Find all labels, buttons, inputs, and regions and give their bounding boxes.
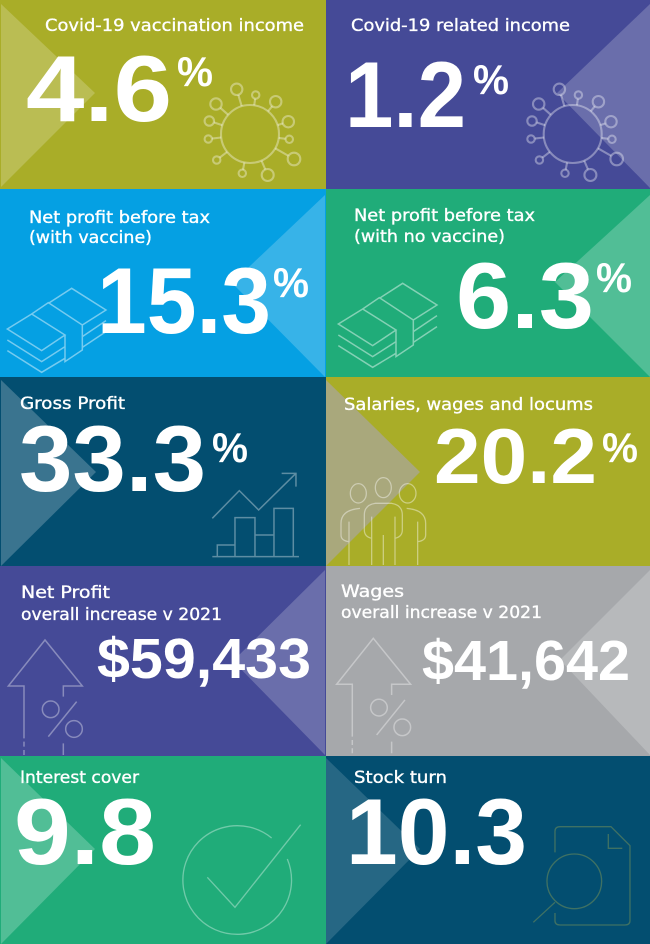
panel: Net profit before tax (with vaccine) [0, 189, 326, 377]
percent sign: % [273, 259, 309, 306]
value: $59,433 [97, 627, 311, 691]
icon: banknotes [7, 288, 106, 372]
heading: Salaries, wages and locums [344, 395, 593, 415]
value: 6.3 [456, 243, 594, 348]
panel: Stock turn [326, 756, 650, 944]
heading: Net Profit [21, 583, 110, 603]
panel: Net profit before tax (with no vaccine) [326, 189, 650, 377]
panel: Gross Profit [0, 377, 326, 566]
subheading: overall increase v 2021 [341, 603, 542, 623]
percent sign: % [596, 254, 632, 301]
value: 9.8 [14, 779, 156, 884]
heading: Covid-19 related income [351, 16, 570, 36]
panel: Net Profit overall increase [0, 566, 326, 756]
icon: document magnifier [533, 827, 630, 925]
value: 33.3 [19, 406, 206, 511]
panel: Interest cover [0, 756, 326, 944]
value: 10.3 [346, 779, 527, 884]
subheading: (with vaccine) [29, 228, 152, 248]
value: 1.2 [345, 42, 466, 147]
heading: Net profit before tax [29, 208, 210, 228]
panel: Covid-19 vaccination income [0, 0, 326, 189]
heading: Gross Profit [20, 394, 125, 414]
value: $41,642 [422, 629, 630, 693]
panel: Salaries, wages and locums [326, 377, 650, 566]
percent sign: % [473, 56, 509, 103]
heading: Stock turn [354, 768, 447, 788]
panel: Covid-19 related income [326, 0, 650, 189]
icon: check mark [183, 825, 301, 934]
panel: Wages overall increase [326, 566, 650, 756]
icon: virus [527, 84, 623, 181]
heading: Net profit before tax [354, 206, 535, 226]
heading: Wages [341, 582, 404, 602]
icon: banknotes [338, 283, 437, 367]
percent sign: % [177, 48, 213, 95]
percent sign: % [602, 424, 638, 471]
icon: percent up arrow [8, 640, 82, 755]
value: 20.2 [434, 412, 597, 500]
icon: people [341, 478, 426, 565]
value: 15.3 [97, 248, 271, 353]
subheading: overall increase v 2021 [21, 605, 222, 625]
icon: percent up arrow [337, 638, 411, 753]
icon: virus [205, 84, 300, 181]
percent sign: % [212, 424, 248, 471]
icon: growth chart [212, 473, 299, 557]
heading: Interest cover [20, 768, 139, 788]
subheading: (with no vaccine) [354, 227, 505, 247]
value: 4.6 [26, 36, 172, 141]
heading: Covid-19 vaccination income [45, 16, 304, 36]
